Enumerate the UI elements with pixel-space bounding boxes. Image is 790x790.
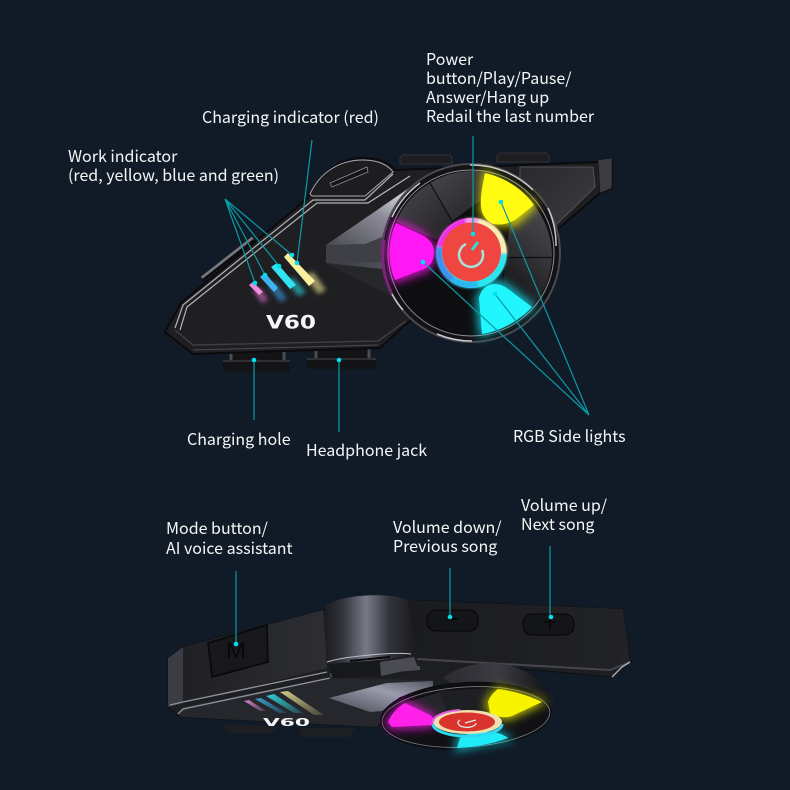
disc sectors	[430, 171, 485, 221]
device: angled view	[168, 595, 630, 755]
label: power button: Redail the last number	[426, 103, 595, 127]
fin	[598, 158, 612, 193]
side strip	[202, 238, 253, 278]
yellow segment small	[488, 689, 542, 717]
label: power button: Power	[426, 46, 474, 70]
label: work indicator: Work indicator	[68, 143, 178, 167]
label: volume up: Next song	[521, 511, 594, 535]
yellow segment	[481, 173, 534, 225]
magenta segment	[389, 223, 434, 280]
label: mode button: Mode button/	[166, 515, 269, 539]
rear tabs	[221, 725, 355, 737]
label: volume down: Volume down/	[393, 514, 502, 538]
power small	[433, 710, 502, 736]
right wing	[408, 600, 630, 668]
M button	[208, 625, 268, 677]
logo: V60: V60	[266, 312, 316, 334]
label: charging hole: Charging hole	[187, 426, 291, 450]
hinge cylinder	[325, 595, 411, 664]
end facet	[168, 647, 183, 707]
label: RGB side lights: RGB Side lights	[513, 423, 626, 447]
disc	[378, 677, 554, 755]
label: volume up: Volume up/	[521, 492, 608, 516]
indicator stripes	[244, 691, 324, 715]
label: headphone jack: Headphone jack	[306, 437, 427, 461]
label: mode button: AI voice assistant	[166, 535, 293, 559]
label: power button: button/Play/Pause/	[426, 65, 572, 89]
disc dome	[443, 663, 552, 700]
leader dots	[234, 200, 553, 646]
lower face	[180, 678, 432, 727]
top buttons	[400, 153, 549, 164]
cyan segment small	[457, 732, 508, 748]
clip bump	[310, 160, 393, 196]
body	[168, 600, 630, 727]
device: top view	[165, 153, 612, 372]
cone	[326, 186, 412, 296]
side wall	[183, 610, 327, 703]
cone small	[329, 681, 433, 712]
bottom ports	[223, 348, 376, 372]
clip slot	[330, 167, 368, 187]
power icon	[459, 244, 483, 267]
indicator bars	[249, 253, 326, 303]
logo: V60 small: V60	[263, 716, 311, 729]
label: work indicator: (red, yellow, blue and green)	[68, 162, 279, 186]
right body panel	[520, 167, 595, 240]
minus button	[427, 610, 478, 631]
label: volume down: Previous song	[393, 533, 497, 557]
label: charging indicator: Charging indicator (red)	[202, 104, 379, 128]
plus button	[523, 614, 574, 635]
glows	[389, 173, 534, 334]
power button	[436, 218, 506, 288]
magenta segment small	[388, 703, 434, 727]
main body	[165, 158, 612, 354]
control disc	[382, 164, 560, 342]
label: power button: Answer/Hang up	[426, 84, 549, 108]
M button: M	[226, 638, 246, 663]
body bevel lines	[175, 174, 410, 330]
rim highlights	[392, 165, 556, 341]
leader lines	[225, 136, 589, 644]
cyan segment	[479, 284, 532, 334]
